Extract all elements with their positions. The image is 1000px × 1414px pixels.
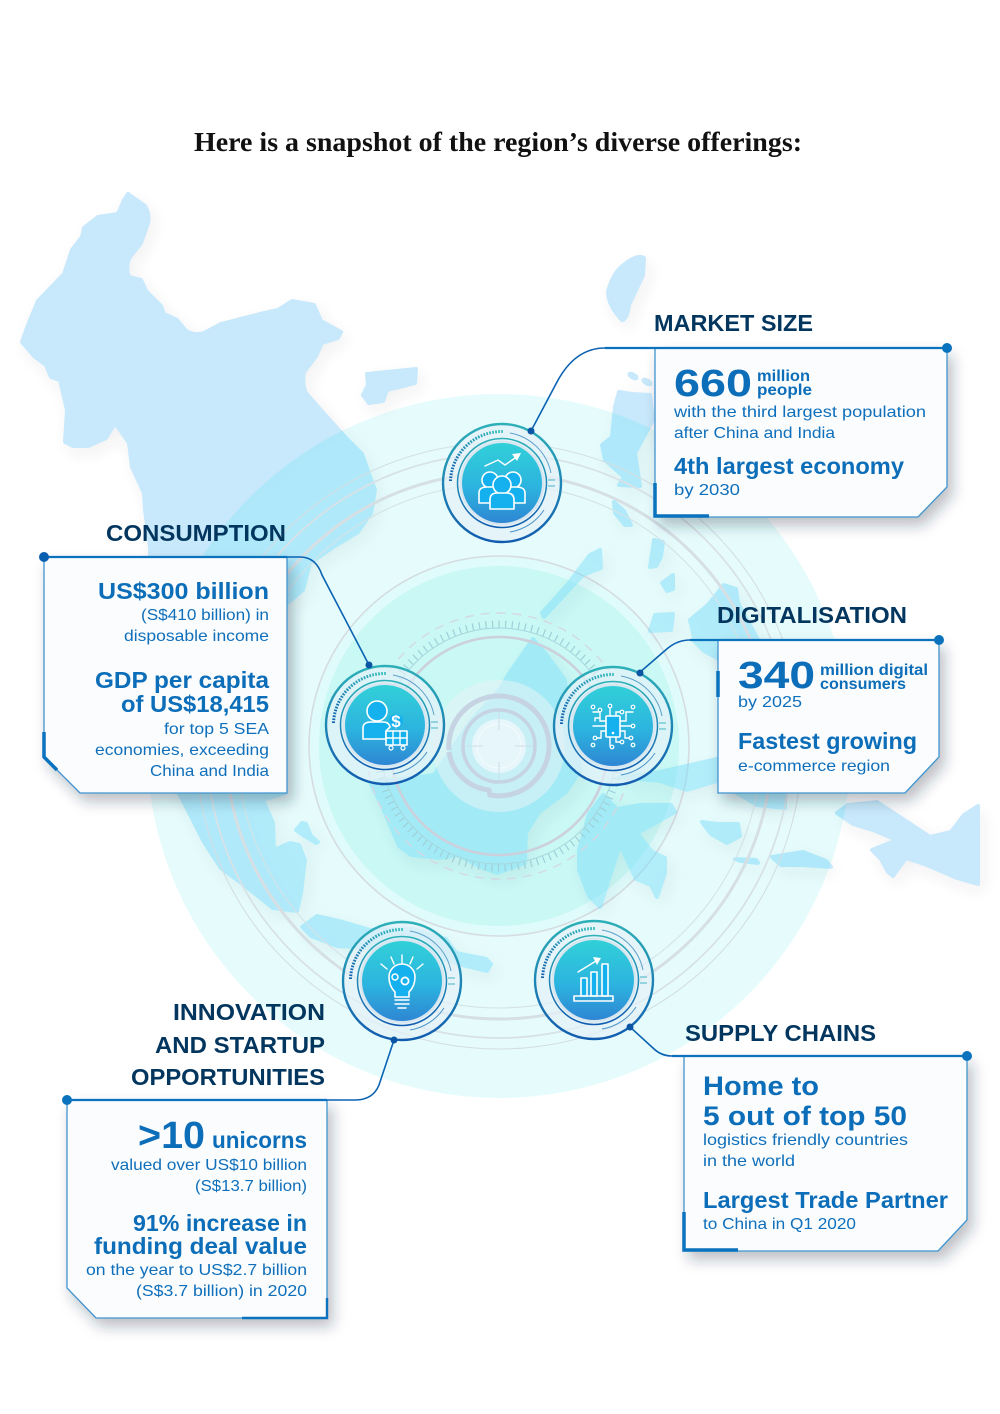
- panel: innovation and startup opportunities: funding deal value: [94, 1233, 307, 1259]
- panel: innovation and startup opportunities: (S$13.7 billion): [195, 1178, 307, 1195]
- panel: supply chains: 5 out of top 50: [703, 1101, 907, 1131]
- title: Here is a snapshot of the region’s diverse offerings:: [194, 127, 802, 157]
- panel: market size: million: [757, 368, 810, 385]
- radar rings and centre target: [196, 443, 802, 1049]
- panel: consumption: GDP per capita: [95, 667, 269, 693]
- panel: digitalisation: million digital: [820, 662, 928, 679]
- radar background discs: [147, 394, 851, 1098]
- icon: consumption shopper: $: [391, 712, 401, 731]
- panel: market size: with the third largest population: [673, 404, 926, 421]
- panel: innovation and startup opportunities: [62, 999, 398, 1318]
- panel: consumption: [39, 520, 372, 793]
- panel: supply chains: Home to: [703, 1071, 819, 1101]
- icon: consumption shopper: [326, 666, 444, 784]
- map of Asia and Southeast Asia: [22, 194, 978, 971]
- heading: innovation and startup opportunities: INNOVATION: [173, 999, 325, 1025]
- heading: consumption: CONSUMPTION: [106, 520, 286, 546]
- panel: market size: 660: [674, 363, 752, 405]
- panel: consumption: of US$18,415: [121, 691, 269, 717]
- heading: innovation and startup opportunities: [131, 999, 325, 1090]
- heading: innovation and startup opportunities: AND STARTUP: [155, 1032, 325, 1058]
- icon: market size people: [443, 424, 561, 542]
- panel: digitalisation: [636, 602, 944, 793]
- panel: market size: by 2030: [674, 482, 740, 499]
- panel: innovation and startup opportunities: unicorns: [212, 1127, 307, 1153]
- panel: consumption: China and India: [150, 763, 269, 780]
- panel: market size: after China and India: [674, 425, 835, 442]
- icon: supply chains bar chart: [535, 921, 653, 1039]
- icon: innovation light bulb: [343, 922, 461, 1040]
- heading: market size: MARKET SIZE: [654, 310, 813, 336]
- icon: digitalisation chip: [554, 667, 672, 785]
- panel: supply chains: in the world: [703, 1153, 795, 1170]
- panel: market size: [528, 310, 952, 517]
- panel: innovation and startup opportunities: on the year to US$2.7 billion: [86, 1262, 307, 1279]
- panel: consumption: US$300 billion: [98, 578, 269, 604]
- heading: digitalisation: DIGITALISATION: [717, 602, 907, 628]
- panel: supply chains: logistics friendly countries: [703, 1132, 908, 1149]
- panel: consumption: for top 5 SEA: [164, 721, 269, 738]
- panel: consumption: economies, exceeding: [95, 742, 269, 759]
- panel: digitalisation: 340: [738, 655, 815, 697]
- panel: supply chains: [626, 1020, 972, 1251]
- panel: consumption: disposable income: [124, 628, 269, 645]
- panel: digitalisation: by 2025: [738, 694, 802, 711]
- panel: market size: people: [757, 382, 812, 399]
- panel: digitalisation: Fastest growing: [738, 728, 917, 754]
- heading: supply chains: SUPPLY CHAINS: [685, 1020, 876, 1046]
- panel: innovation and startup opportunities: (S$3.7 billion) in 2020: [136, 1283, 307, 1300]
- heading: innovation and startup opportunities: OPPORTUNITIES: [131, 1064, 325, 1090]
- panel: innovation and startup opportunities: 91% increase in: [133, 1210, 307, 1236]
- panel: market size: 4th largest economy: [674, 453, 904, 479]
- panel: digitalisation: e-commerce region: [738, 758, 890, 775]
- panel: digitalisation: consumers: [820, 676, 906, 693]
- panel: innovation and startup opportunities: >10: [138, 1115, 205, 1157]
- panel: consumption: (S$410 billion) in: [141, 607, 269, 624]
- panel: supply chains: Largest Trade Partner: [703, 1187, 948, 1213]
- panel: innovation and startup opportunities: valued over US$10 billion: [111, 1157, 307, 1174]
- panel: supply chains: to China in Q1 2020: [703, 1216, 856, 1233]
